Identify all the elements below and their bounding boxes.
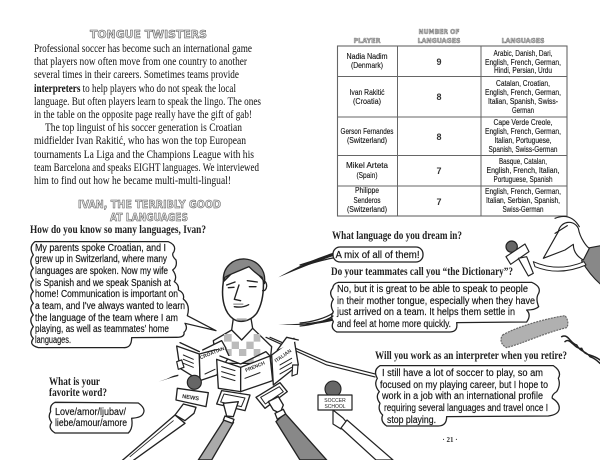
heading: Ivan, the terribly good at languages: IVAN, THE TERRIBLY GOOD (78, 198, 221, 211)
text block: introduction: several times in their careers. Sometimes teams provide (34, 69, 239, 81)
speech bubble: languages answer: languages. (35, 335, 71, 346)
speech bubble: mother tongue: just arrived on a team. It helps them settle in (336, 307, 515, 318)
row: Nadia Nadim: Hindi, Persian, Urdu (494, 65, 552, 75)
row: Ivan Rakitic: 8 (436, 92, 442, 102)
speech bubble: languages answer: grew up in Switzerland, where many (35, 254, 167, 265)
table header: LANGUAGES (418, 37, 460, 45)
speech bubble: languages answer: My parents spoke Croatian, and I (35, 243, 166, 254)
row: Ivan Rakitic: Catalan, Croatian, (496, 78, 550, 88)
text block: introduction: language. But often players learn to speak the lingo. The ones (34, 96, 261, 108)
row: Gerson Fernandes: Italian, Portuguese, (494, 135, 552, 145)
hands holding books (177, 360, 298, 376)
speech bubble: favorite word (49, 402, 144, 433)
speech bubble: retire answer: work in a job with an international profile (381, 391, 543, 402)
speech bubble: languages answer: a team, and I've always wanted to learn (35, 301, 185, 312)
book: Croatian: CROATIAN (199, 346, 226, 361)
row: Mikel Arteta (346, 156, 560, 184)
row: Philippe Senderos: (Switzerland) (347, 204, 387, 214)
row: Mikel Arteta: 7 (436, 166, 442, 176)
speech bubble: languages answer: the language of the team where I am (35, 313, 178, 324)
row: Philippe Senderos: Swiss-German (502, 204, 544, 214)
speech bubble: languages answer: home! Communication is important on (35, 289, 178, 300)
speech bubble: languages answer: languages are spoken. Now my wife (35, 266, 168, 277)
row: Nadia Nadim: English, French, German, (485, 57, 561, 67)
speech bubble: favorite word: Love/amor/ljubav/ (55, 407, 126, 418)
heading: Tongue Twisters: TONGUE TWISTERS (90, 28, 207, 41)
text block: introduction: The top linguist of his soccer generation is Croatian (45, 122, 242, 134)
row: Philippe Senderos: Philippe (355, 185, 379, 195)
reporter with microphone (506, 216, 600, 284)
news microphone: NEWS (182, 394, 200, 402)
heading: Ivan, the terribly good at languages: AT LANGUAGES (110, 211, 188, 224)
row: Nadia Nadim: Nadia Nadim (346, 51, 388, 61)
table header: NUMBER OF (418, 28, 460, 36)
row: Mikel Arteta: Mikel Arteta (346, 160, 388, 170)
speech bubble: languages answer: playing, as well as teammates' home (35, 324, 169, 335)
boom microphone (501, 316, 600, 363)
row: Ivan Rakitic: (Croatia) (353, 96, 381, 106)
speech bubble: mother tongue: No, but it is great to be able to speak to people (337, 284, 528, 295)
text block: introduction: midfielder Ivan Rakitić, who has won the top European (34, 135, 246, 147)
row: Ivan Rakitic (350, 78, 561, 115)
text block: introduction: Professional soccer has become such an international game (34, 43, 252, 55)
speech bubble: retire answer: requiring several languages and travel once I (384, 403, 548, 414)
page number: · 21 · (442, 436, 458, 444)
row: Nadia Nadim: (Denmark) (351, 60, 383, 70)
question: favorite word (49, 376, 107, 399)
question: favorite word: favorite word? (49, 387, 107, 399)
text block: introduction: that players now often move from one country to another (34, 56, 247, 68)
tablet and hand (198, 391, 250, 460)
row: Ivan Rakitic: German (512, 105, 534, 115)
soccer school microphone (318, 381, 393, 460)
table header: PLAYER (354, 37, 381, 45)
speech bubble: retire answer (376, 366, 560, 426)
book: Italian: ITALIAN (274, 348, 293, 364)
speech tails to right bubbles (300, 255, 333, 326)
row: Ivan Rakitic: Italian, Spanish, Swiss- (488, 96, 558, 106)
row: Mikel Arteta: Portuguese, Spanish (494, 174, 553, 184)
table header: LANGUAGES (502, 37, 544, 45)
text block: introduction: team Barcelona and speaks EIGHT languages. We interviewed (34, 162, 259, 174)
speech tails to Ivan (158, 253, 375, 382)
row: Gerson Fernandes: Spanish, Swiss-German (488, 144, 558, 154)
row: Philippe Senderos: 7 (436, 197, 442, 207)
speech bubble: mother tongue: and feel at home more quickly. (337, 319, 451, 330)
row: Philippe Senderos (347, 185, 561, 214)
row: Philippe Senderos: English, French, German, (485, 186, 561, 196)
row: Gerson Fernandes: Cape Verde Creole, (494, 117, 552, 127)
row: Ivan Rakitic: Ivan Rakitić (350, 87, 384, 97)
soccer school microphone: SOCCER (324, 398, 346, 404)
text block: introduction: interpreters to help players who do not speak the local (34, 83, 236, 95)
book: French (217, 352, 273, 392)
table: player languages (337, 28, 567, 216)
row: Gerson Fernandes: 8 (436, 132, 442, 142)
text block: introduction: in the table on the opposite page really have the gift of gab! (34, 109, 252, 121)
question: favorite word: What is your (49, 376, 100, 388)
phone and hand (256, 383, 327, 460)
soccer school microphone: SCHOOL (324, 404, 346, 410)
speech bubble: favorite word: liebe/amour/amore (55, 418, 127, 429)
heading: Ivan, the terribly good at languages (78, 198, 221, 224)
row: Gerson Fernandes: English, French, German, (485, 126, 561, 136)
question: the Dictionary: Do your teammates call you “the Dictionary”? (331, 266, 513, 278)
speech bubble: retire answer: I still have a lot of soccer to play, so am (382, 368, 543, 379)
news microphone (122, 375, 208, 460)
row: Nadia Nadim (346, 48, 561, 75)
table header (354, 28, 544, 45)
row: Gerson Fernandes: (Switzerland) (347, 135, 387, 145)
row: Gerson Fernandes: Gerson Fernandes (340, 126, 394, 136)
row: Gerson Fernandes (340, 117, 561, 154)
text block: introduction: tournaments La Liga and the Champions League with his (34, 149, 254, 161)
book: French: FRENCH (244, 360, 266, 374)
text block: introduction: him to find out how he became multi-multi-lingual! (34, 175, 231, 187)
speech bubble: languages answer: is Spanish and we speak Spanish at (35, 278, 171, 289)
text block: introduction (34, 43, 261, 187)
speech bubble: mother tongue (331, 282, 539, 332)
row: Philippe Senderos: Senderos (354, 195, 380, 205)
row: Ivan Rakitic: English, French, German, (485, 87, 561, 97)
speech bubble: mother tongue: in their mother tongue, especially when they have (337, 296, 535, 307)
row: Philippe Senderos: Italian, Serbian, Spanish, (486, 195, 560, 205)
speech bubble: retire answer: focused on my playing career, but I hope to (380, 380, 548, 391)
illustration: Ivan with books and reporters (122, 253, 375, 460)
book: Croatian (177, 341, 229, 381)
row: Nadia Nadim: Arabic, Danish, Dari, (494, 48, 552, 58)
speech bubble: languages answer (31, 242, 216, 348)
question: dream language: What language do you dream in? (332, 230, 462, 242)
row: Nadia Nadim: 9 (436, 57, 442, 67)
row: Mikel Arteta: (Spain) (356, 170, 378, 180)
speech bubble: retire answer: stop playing. (387, 415, 436, 426)
head and jersey (213, 259, 272, 363)
book: Italian (272, 337, 298, 385)
row: Mikel Arteta: English, French, Italian, (486, 165, 560, 175)
question: how do you know: How do you know so many languages, Ivan? (30, 224, 206, 236)
speech bubble: mix of all: A mix of all of them! (336, 250, 420, 261)
row: Mikel Arteta: Basque, Catalan, (499, 156, 547, 166)
